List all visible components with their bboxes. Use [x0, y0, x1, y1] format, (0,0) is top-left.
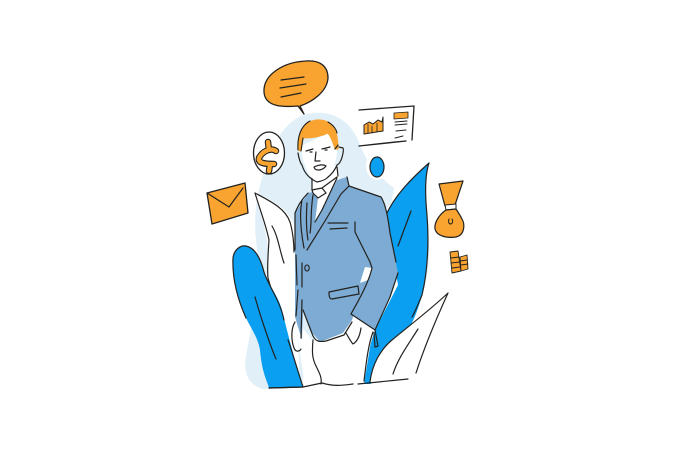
- money bag icon: [435, 181, 464, 237]
- speech bubble icon: [264, 61, 328, 114]
- chart card icon: [359, 106, 414, 146]
- white leaf left: [255, 193, 300, 385]
- blue leaf left: [233, 246, 303, 388]
- blue leaf right: [364, 163, 429, 384]
- white halo around figure and dot: [366, 152, 388, 180]
- blue dot: [370, 157, 384, 177]
- man: collar: [312, 177, 337, 198]
- white leaf right: [370, 293, 448, 383]
- man: head: [298, 120, 343, 182]
- man: shirt and neck: [312, 165, 340, 224]
- coin stacks icon: [450, 251, 468, 273]
- envelope icon: [207, 183, 248, 224]
- dollar coin icon: [254, 132, 284, 174]
- man: jacket: [295, 177, 398, 347]
- man: legs: [269, 320, 408, 388]
- background blob: [245, 113, 429, 389]
